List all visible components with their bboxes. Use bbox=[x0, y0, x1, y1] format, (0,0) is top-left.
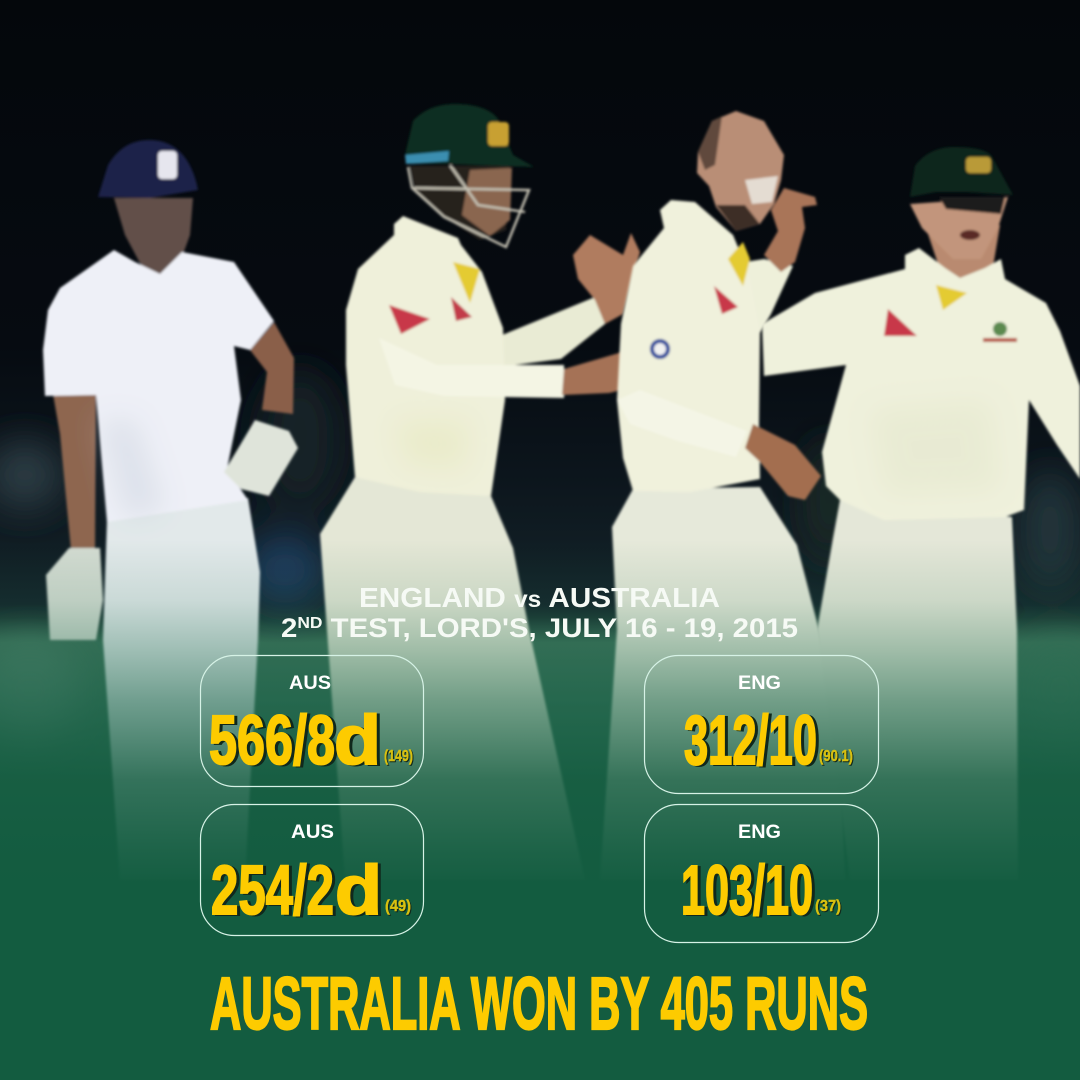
overs: (49) bbox=[385, 898, 411, 915]
left arm bbox=[53, 394, 96, 550]
helmet bbox=[405, 104, 534, 167]
match title bbox=[281, 582, 798, 643]
shirt shading bbox=[870, 400, 1000, 495]
second logo bbox=[451, 297, 472, 321]
trousers bbox=[103, 498, 260, 880]
team label: ENG bbox=[738, 673, 781, 694]
right arm bbox=[250, 322, 294, 414]
trousers bbox=[320, 477, 585, 880]
near hand bbox=[562, 348, 654, 395]
sunscreen bbox=[745, 176, 778, 204]
overs: (149) bbox=[384, 748, 413, 765]
trousers bbox=[817, 500, 1018, 880]
score card: ENG first innings bbox=[644, 656, 878, 794]
score: 254/2 bbox=[211, 851, 334, 929]
score: d bbox=[335, 851, 382, 929]
raised hand bbox=[764, 188, 817, 272]
near sleeve bbox=[379, 338, 564, 398]
helmet crest bbox=[158, 151, 177, 179]
forearm and hand bbox=[745, 424, 821, 500]
score card: ENG second innings bbox=[644, 804, 878, 942]
score: d bbox=[334, 701, 381, 779]
shirt bbox=[617, 200, 760, 492]
face bbox=[910, 197, 1008, 259]
beard bbox=[716, 205, 760, 231]
back of head bbox=[410, 166, 510, 240]
sleeve logo bbox=[652, 341, 668, 357]
player: England batsman bbox=[43, 140, 298, 880]
collar bbox=[936, 285, 967, 310]
folded arm bbox=[617, 390, 747, 457]
line one: ENGLAND vs AUSTRALIA bbox=[359, 582, 720, 613]
left glove bbox=[46, 548, 103, 640]
team label: ENG bbox=[738, 822, 781, 843]
trousers bbox=[600, 487, 845, 880]
head bbox=[697, 111, 784, 231]
cap badge bbox=[966, 157, 991, 173]
helmet stripe bbox=[405, 151, 449, 164]
score card: AUS second innings bbox=[200, 804, 424, 936]
shirt bbox=[346, 216, 505, 496]
collar bbox=[728, 242, 750, 286]
score: 312/10 bbox=[684, 701, 817, 779]
far arm bbox=[490, 297, 605, 368]
raised sleeve bbox=[745, 259, 793, 338]
helmet grille bbox=[408, 165, 529, 247]
sponsor logo bbox=[389, 305, 430, 334]
face bbox=[114, 198, 193, 282]
cap bbox=[910, 147, 1013, 197]
sponsor logo bbox=[714, 286, 738, 314]
score: 103/10 bbox=[681, 851, 813, 929]
hair shadow bbox=[698, 116, 722, 170]
overs: (37) bbox=[815, 898, 841, 915]
shirt shading bbox=[100, 420, 165, 520]
player: Australian in helmet bbox=[320, 104, 654, 880]
line two: ND bbox=[297, 615, 322, 632]
helmet badge bbox=[488, 122, 509, 146]
far hand bbox=[573, 233, 640, 324]
overs: (90.1) bbox=[819, 748, 853, 765]
team label: AUS bbox=[291, 822, 334, 843]
player: captain in cap bbox=[762, 147, 1080, 880]
right glove bbox=[224, 420, 298, 496]
neck bbox=[925, 225, 1000, 285]
face bbox=[462, 168, 512, 236]
line two: TEST, LORD'S, JULY 16 - 19, 2015 bbox=[322, 613, 798, 643]
shirt bbox=[762, 248, 1080, 520]
shirt bbox=[43, 250, 274, 522]
collar bbox=[453, 262, 480, 303]
line two: 2 bbox=[281, 613, 296, 643]
score card: AUS first innings bbox=[200, 656, 424, 786]
score: 566/8 bbox=[209, 701, 335, 779]
mouth bbox=[960, 230, 980, 240]
player: bowler bbox=[600, 111, 845, 880]
sponsor logo bbox=[884, 309, 917, 336]
blurred crowd bbox=[0, 370, 1080, 740]
team label: AUS bbox=[289, 673, 331, 694]
sunglasses bbox=[939, 197, 1005, 214]
shirt shading bbox=[395, 420, 470, 470]
helmet bbox=[98, 140, 198, 198]
team crest bbox=[983, 322, 1017, 342]
